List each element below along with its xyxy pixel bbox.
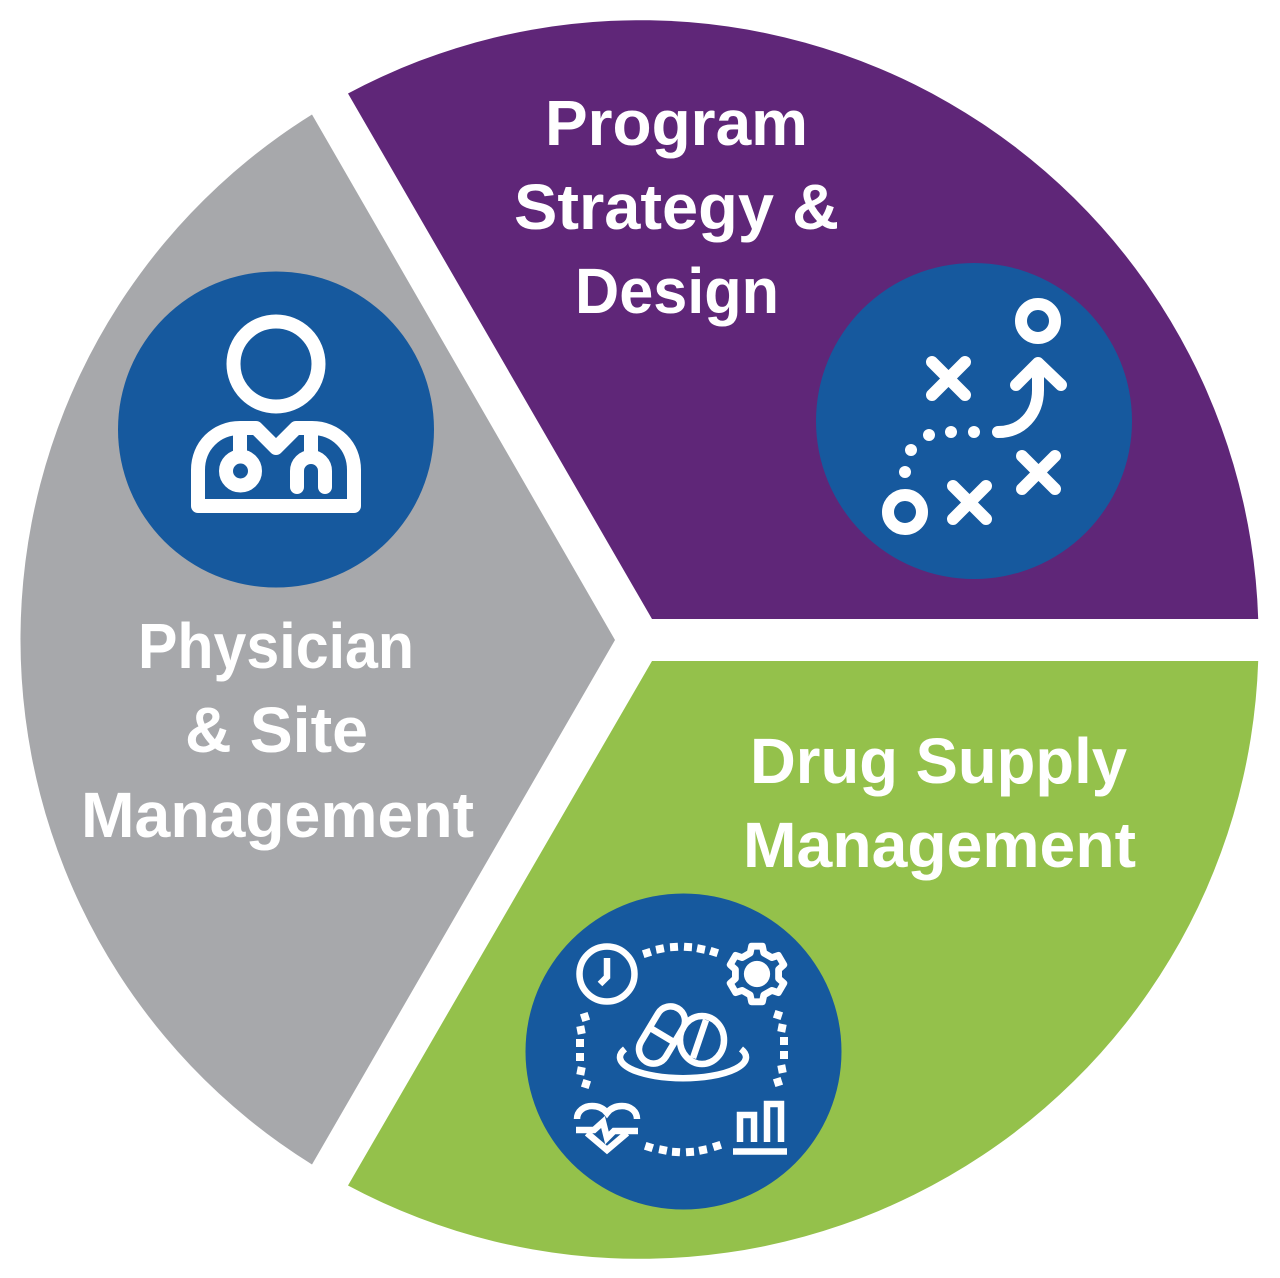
heading: Drug Supply Management: Management xyxy=(743,809,1136,881)
icon: gear xyxy=(730,946,784,1002)
heading: Physician & Site Management: Management xyxy=(81,779,474,851)
heading: Physician & Site Management: Physician xyxy=(138,610,414,682)
panel: drug supply management xyxy=(348,661,1258,1259)
icon: pills on plate xyxy=(620,1001,746,1078)
icon: bar chart xyxy=(733,1104,787,1152)
icon: doctor with stethoscope xyxy=(118,272,434,588)
dotted connector ring xyxy=(576,943,788,1156)
heading: Physician & Site Management xyxy=(81,610,474,851)
panel: physician and site management xyxy=(20,114,615,1164)
heading: Program Strategy & Design xyxy=(514,87,839,327)
icon: heart with pulse xyxy=(576,1106,638,1150)
grey wedge xyxy=(20,114,615,1164)
icon: clock xyxy=(580,946,634,1002)
green wedge xyxy=(348,661,1258,1259)
panel: program strategy and design xyxy=(348,20,1258,619)
heading: Drug Supply Management: Drug Supply xyxy=(750,725,1127,797)
icon: drug supply cycle xyxy=(526,894,842,1210)
heading: Drug Supply Management xyxy=(743,725,1136,881)
heading: Program Strategy & Design: Program xyxy=(545,87,808,159)
icon: play diagram xyxy=(816,263,1132,579)
heading: Program Strategy & Design: Strategy & xyxy=(514,171,839,243)
heading: Program Strategy & Design: Design xyxy=(575,255,779,327)
heading: Physician & Site Management: & Site xyxy=(185,694,368,766)
purple wedge xyxy=(348,20,1258,619)
